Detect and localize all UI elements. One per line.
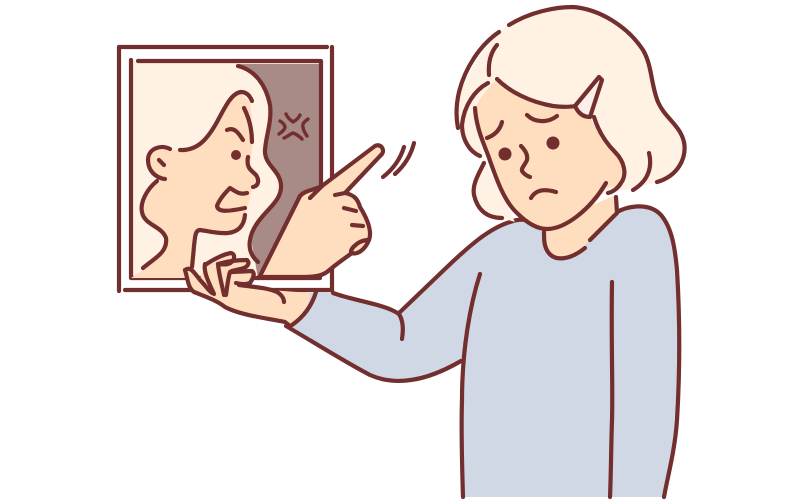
neck: [544, 195, 617, 259]
face: [475, 79, 624, 229]
icon: anger mark: [279, 114, 308, 139]
hair: [457, 7, 685, 222]
mirror: [119, 47, 332, 291]
reflection: angry face: [131, 66, 281, 278]
lower hand holding mirror: [185, 253, 316, 326]
icon: hair clip: [575, 77, 602, 117]
icon: motion lines: [383, 143, 414, 177]
body and sleeve: [285, 206, 679, 497]
pointing hand: [259, 145, 383, 278]
